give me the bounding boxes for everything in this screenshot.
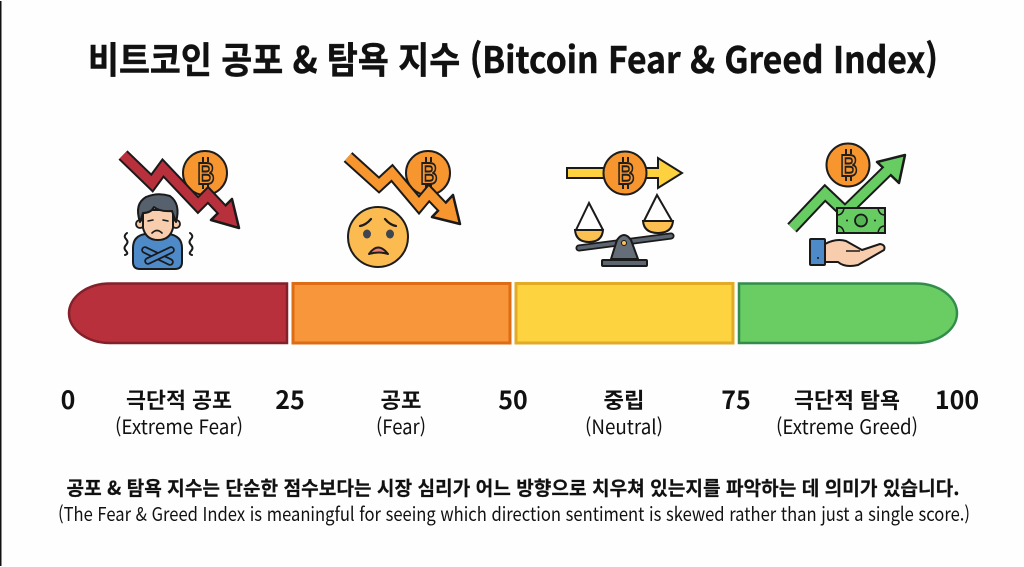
label: neutral: (Neutral) bbox=[585, 411, 663, 440]
rising arrow bbox=[792, 155, 905, 228]
label: extreme fear bbox=[115, 384, 243, 440]
bitcoin coin: B bbox=[618, 156, 634, 191]
worried face bbox=[348, 207, 408, 267]
label: fear: 공포 bbox=[380, 384, 422, 415]
title: 비트코인 공포 & 탐욕 지수 (Bitcoin Fear & Greed Index) bbox=[88, 31, 938, 84]
sideways arrow bbox=[567, 158, 682, 188]
label: neutral: 중립 bbox=[604, 384, 644, 415]
label: extreme fear: 극단적 공포 bbox=[126, 384, 232, 415]
icon: neutral bbox=[567, 152, 682, 266]
falling arrow bbox=[348, 157, 460, 224]
bitcoin coin: B bbox=[198, 156, 214, 191]
scale numbers: 75 bbox=[721, 381, 751, 417]
worried person bbox=[124, 194, 192, 269]
label: extreme greed: (Extreme Greed) bbox=[776, 411, 918, 440]
bitcoin coin: B bbox=[420, 156, 438, 191]
segment: fear bbox=[293, 284, 510, 343]
icon: extreme fear bbox=[123, 151, 239, 269]
banknote bbox=[837, 208, 885, 233]
scale numbers: 100 bbox=[935, 381, 979, 417]
label: neutral bbox=[585, 384, 663, 440]
scale numbers: 50 bbox=[498, 381, 528, 417]
label: fear: (Fear) bbox=[376, 411, 426, 440]
gauge bar bbox=[69, 284, 957, 343]
icon: extreme greed bbox=[792, 144, 905, 266]
open hand bbox=[810, 239, 884, 266]
balance scale bbox=[575, 195, 673, 266]
label: extreme fear: (Extreme Fear) bbox=[115, 411, 243, 440]
segment: extreme fear bbox=[69, 284, 287, 343]
scale numbers: 25 bbox=[275, 381, 305, 417]
segment: neutral bbox=[516, 284, 733, 343]
scale numbers: 0 bbox=[61, 381, 75, 417]
bitcoin coin: B bbox=[840, 148, 858, 183]
icon: fear bbox=[348, 151, 460, 267]
falling arrow bbox=[123, 155, 239, 228]
scale numbers bbox=[61, 381, 979, 417]
label: extreme greed bbox=[776, 384, 918, 440]
label: extreme greed: 극단적 탐욕 bbox=[794, 384, 900, 415]
label: fear bbox=[376, 384, 426, 440]
caption: Korean: 공포 & 탐욕 지수는 단순한 점수보다는 시장 심리가 어느 방향으로 치우쳐 있는지를 파악하는 데 의미가 있습니다. bbox=[66, 472, 960, 501]
segment: extreme greed bbox=[739, 284, 957, 343]
